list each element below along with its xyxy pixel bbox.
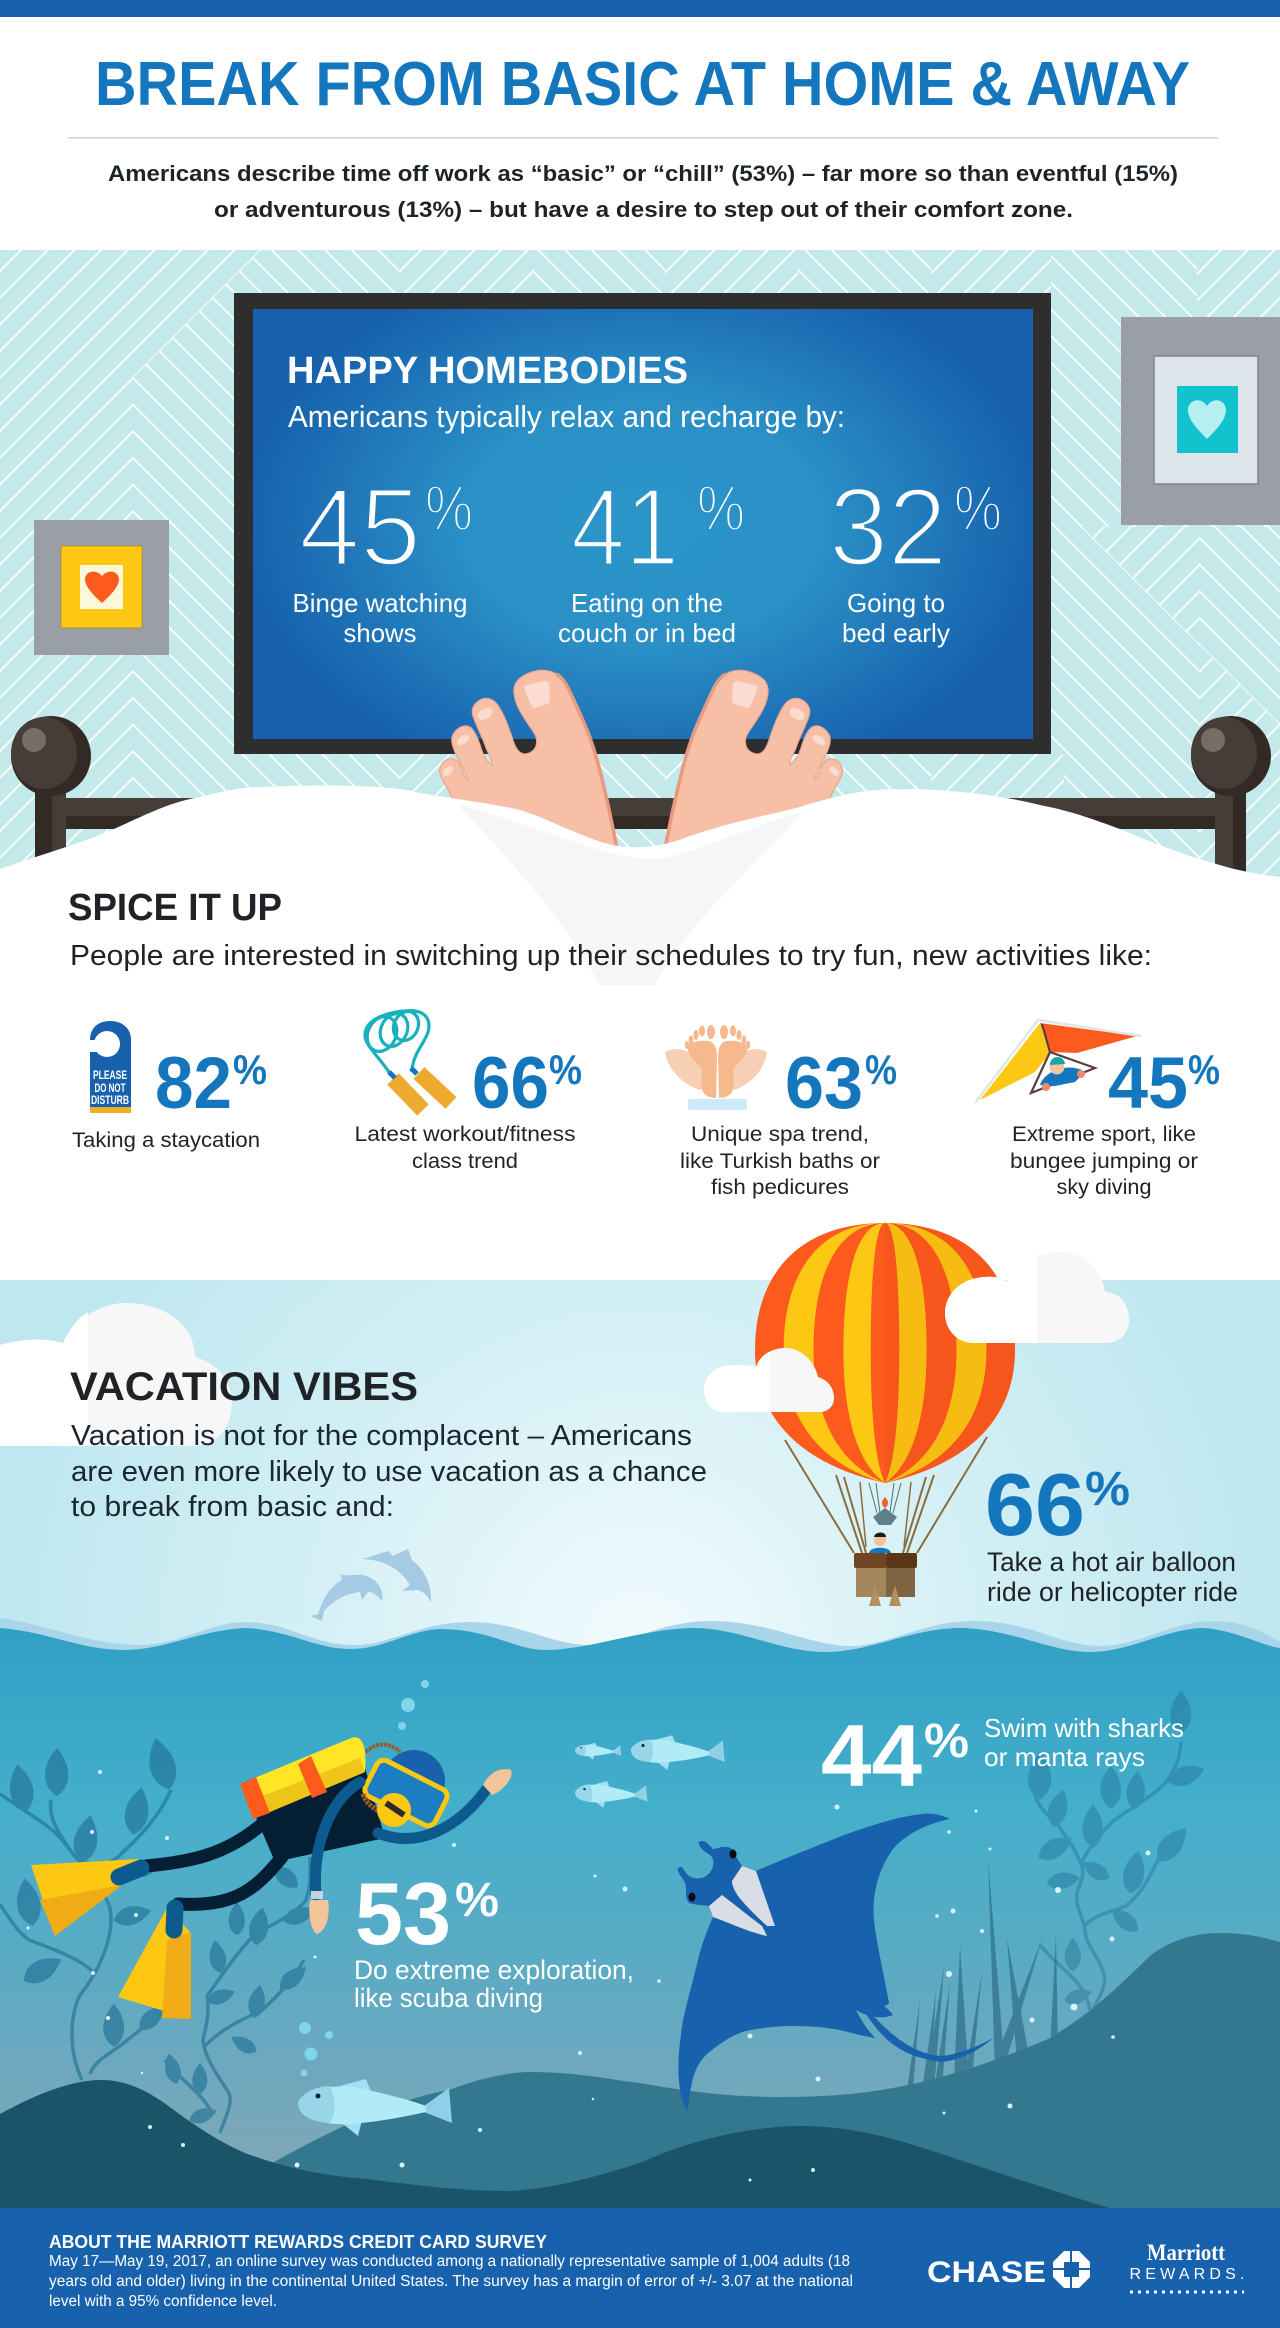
burner and flame — [873, 1497, 897, 1525]
stat: 53% scuba: % — [455, 1874, 499, 1927]
heading: vacation vibes: VACATION VIBES — [70, 1365, 418, 1409]
number 66%: 66 — [472, 1043, 549, 1124]
body text: are even more likely to use vacation as a chance — [71, 1456, 707, 1488]
balloon pilot — [869, 1532, 891, 1553]
label: class trend — [412, 1150, 518, 1173]
number 63%: % — [865, 1046, 897, 1093]
icon: do not disturb door hanger: DISTURB — [91, 1093, 129, 1107]
blanket — [0, 785, 1280, 1290]
number 82%: % — [233, 1046, 267, 1093]
footer body text: level with a 95% confidence level. — [49, 2293, 277, 2310]
icon: scuba diver — [31, 1737, 512, 2019]
television — [234, 293, 1051, 754]
tank — [240, 1737, 365, 1819]
logo: marriott rewards: Marriott — [1147, 2240, 1225, 2265]
title: BREAK FROM BASIC AT HOME & AWAY — [95, 50, 1190, 119]
label: Taking a staycation — [72, 1129, 260, 1152]
logo: marriott rewards — [1130, 2240, 1244, 2292]
stat: 66% hot air balloon: Take a hot air balloon — [987, 1547, 1236, 1577]
icon: jump rope — [362, 1007, 451, 1110]
back hill — [269, 1933, 1280, 2208]
label: like Turkish baths or — [680, 1150, 880, 1173]
stat: 66% hot air balloon — [985, 1455, 1238, 1607]
stat: 44% sharks or manta rays — [821, 1706, 1184, 1805]
particles — [26, 1770, 1150, 2182]
icon: hang glider — [975, 1020, 1141, 1103]
basket — [854, 1553, 917, 1606]
footer body text: May 17—May 19, 2017, an online survey was conducted among a nationally representative sample of 1,004 adults (18 — [49, 2253, 850, 2270]
stat: 41% eating on the couch: 41 — [571, 466, 679, 589]
footer body text: years old and older) living in the continental United States. The survey has a margin of error of +/- 3.07 at the national — [49, 2273, 853, 2290]
stat: 32% going to bed early: bed early — [842, 618, 950, 648]
stat: 45% binge watching: Binge watching — [292, 588, 468, 618]
panel: spice it up — [68, 887, 1220, 1199]
label: fish pedicures — [711, 1176, 849, 1199]
label — [1010, 1123, 1198, 1199]
stat: 41% eating on the couch: Eating on the — [571, 588, 723, 618]
light wave — [0, 1618, 1280, 1700]
number 82%: 82 — [155, 1043, 232, 1124]
number 63%: 63 — [785, 1043, 863, 1124]
water — [0, 1628, 1280, 2208]
sea grass — [907, 1858, 1058, 2090]
stat: 45% binge watching: 45 — [299, 466, 421, 589]
stat: 53% scuba: Do extreme exploration, — [354, 1955, 634, 1985]
icon: small fish 3 — [575, 1781, 647, 1808]
subheading: Americans typically relax and recharge by: — [288, 399, 845, 434]
body — [255, 1768, 385, 1862]
head and mask — [383, 1750, 445, 1812]
label — [680, 1123, 880, 1199]
stat: spa — [665, 1025, 897, 1199]
stat: 32% going to bed early: 32 — [829, 466, 947, 589]
label: bungee jumping or — [1010, 1150, 1198, 1173]
heading: spice it up: SPICE IT UP — [68, 887, 282, 929]
stat: 32% going to bed early: Going to — [847, 588, 945, 618]
footer body text — [49, 2253, 853, 2310]
stat: workout — [354, 1007, 582, 1173]
panel: footer — [0, 2208, 1280, 2328]
stat: 32% going to bed early: % — [954, 472, 1002, 544]
icon: right foot — [665, 670, 842, 860]
seaweed left — [0, 1735, 318, 2133]
stat: 66% hot air balloon: ride or helicopter ride — [987, 1577, 1238, 1607]
logo: marriott rewards: REWARDS. — [1130, 2266, 1244, 2283]
number 45%: 45 — [1108, 1043, 1188, 1124]
sky background — [0, 1280, 1280, 1650]
icon: cloud over balloon — [945, 1276, 1129, 1343]
icon: do not disturb door hanger: PLEASE — [93, 1068, 127, 1082]
bubbles — [299, 1680, 429, 2076]
logo: chase — [927, 2251, 1090, 2289]
stat: 66% hot air balloon: 66 — [985, 1455, 1085, 1554]
intro text — [108, 161, 1178, 222]
stat: 53% scuba: 53 — [355, 1864, 451, 1963]
number 45%: % — [1188, 1046, 1220, 1093]
stat: 41% eating on the couch: couch or in bed — [558, 618, 736, 648]
seaweed right — [1028, 1691, 1208, 2014]
stat: 53% scuba: like scuba diving — [354, 1983, 543, 2013]
body text — [71, 1420, 707, 1523]
footer heading: ABOUT THE MARRIOTT REWARDS CREDIT CARD SURVEY — [49, 2232, 547, 2252]
icon: cloud beside balloon — [704, 1348, 834, 1412]
heading: happy homebodies: HAPPY HOMEBODIES — [287, 350, 688, 392]
icon: small fish 2 — [631, 1735, 725, 1770]
stat: 41% eating on the couch: % — [697, 472, 745, 544]
icon: large fish — [298, 2079, 452, 2136]
stat: 32% going to bed early — [829, 466, 1002, 648]
stat: 44% sharks or manta rays: % — [924, 1715, 969, 1768]
stat: 45% binge watching: shows — [344, 618, 416, 648]
stat: 44% sharks or manta rays: or manta rays — [984, 1742, 1145, 1772]
icon: hot air balloon — [755, 1223, 1015, 1606]
legs — [146, 1825, 282, 1904]
label: Latest workout/fitness — [354, 1123, 576, 1146]
label: Extreme sport, like — [1012, 1123, 1196, 1146]
stat: 45% binge watching: % — [425, 472, 473, 544]
body text: to break from basic and: — [71, 1491, 394, 1523]
panel: happy homebodies bedroom — [0, 250, 1280, 1290]
body text: Vacation is not for the complacent – Americans — [71, 1420, 692, 1452]
icon: large left cloud — [0, 1303, 232, 1446]
right picture frame with heart — [1121, 317, 1280, 525]
panel: vacation vibes — [0, 1223, 1280, 1650]
stat: 44% sharks or manta rays: 44 — [821, 1706, 922, 1805]
bed frame — [11, 716, 1271, 880]
left picture frame with heart — [34, 520, 169, 655]
front hill — [0, 2080, 1109, 2208]
intro text: or adventurous (13%) – but have a desire to step out of their comfort zone. — [214, 197, 1073, 222]
stat: staycation — [72, 1021, 267, 1152]
stat: extreme sport — [975, 1020, 1220, 1199]
arms — [315, 1782, 486, 1895]
subheading: People are interested in switching up their schedules to try fun, new activities like: — [70, 940, 1152, 972]
wallpaper — [0, 250, 1280, 910]
top bar — [0, 0, 1280, 17]
label: Unique spa trend, — [691, 1123, 869, 1146]
fins — [31, 1859, 139, 1936]
stat: 44% sharks or manta rays: Swim with sharks — [984, 1713, 1184, 1743]
icon: manta ray — [678, 1814, 993, 2112]
icon: do not disturb door hanger: DO NOT — [94, 1081, 126, 1095]
icon: feet and hands — [665, 1025, 767, 1110]
number 66%: % — [549, 1046, 582, 1093]
balloon envelope — [755, 1223, 1015, 1483]
intro text: Americans describe time off work as “basic” or “chill” (53%) – far more so than eventful (15%) — [108, 161, 1178, 186]
label: sky diving — [1056, 1176, 1152, 1199]
logo: chase: CHASE — [927, 2256, 1046, 2289]
stat: 41% eating on the couch — [558, 466, 745, 648]
icon: do not disturb door hanger — [88, 1021, 131, 1113]
panel: underwater scene — [0, 1618, 1280, 2208]
icon: dolphins — [310, 1549, 431, 1621]
stat: 66% hot air balloon: % — [1085, 1463, 1130, 1516]
icon: left foot — [440, 670, 617, 860]
stat: 53% scuba — [354, 1864, 634, 2013]
label — [354, 1123, 576, 1173]
balloon ropes — [785, 1437, 987, 1553]
stat: 45% binge watching — [292, 466, 473, 648]
icon: small fish 1 — [575, 1743, 621, 1760]
